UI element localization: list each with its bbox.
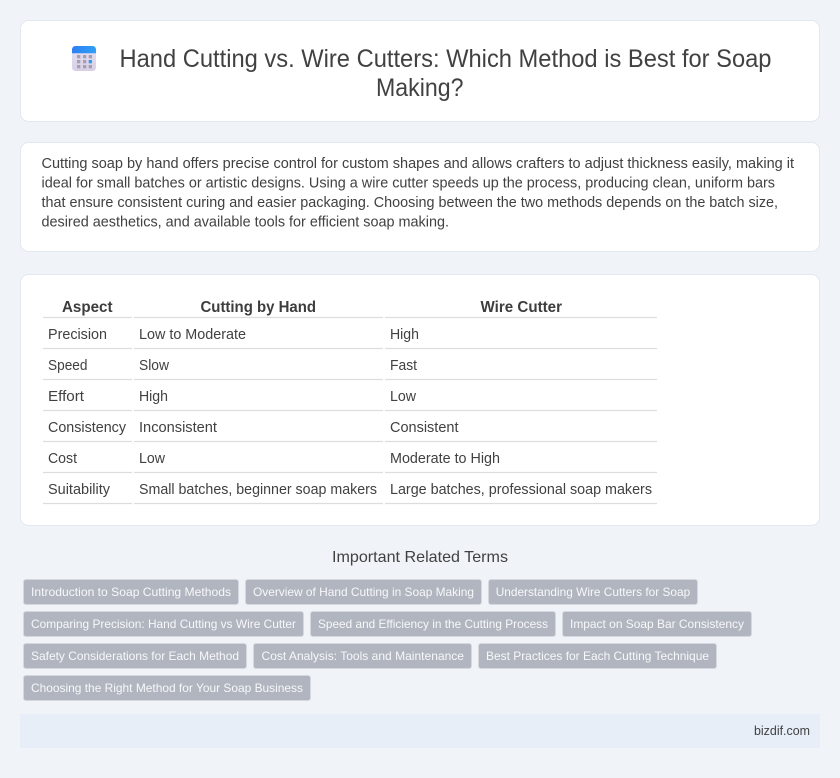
- row: suitability: Suitability: [48, 482, 111, 498]
- row: cost: Cost: [48, 451, 77, 467]
- chip: [310, 612, 556, 636]
- row: precision: [48, 327, 419, 343]
- row: precision: Low to Moderate: [139, 327, 246, 343]
- intro paragraph: Cutting soap by hand offers precise control for custom shapes and allows crafters to adjust thickness easily, making it: [42, 156, 794, 172]
- chip: [562, 612, 752, 636]
- table header row: Aspect: [62, 299, 113, 316]
- chip: Introduction to Soap Cutting Methods: [31, 585, 231, 599]
- chip: [488, 580, 698, 604]
- chip: [24, 580, 238, 604]
- chip: Best Practices for Each Cutting Technique: [486, 649, 709, 663]
- row: speed: Fast: [390, 358, 417, 374]
- chip: [254, 644, 472, 668]
- row: suitability: [48, 482, 652, 498]
- footer: [20, 714, 820, 748]
- chip: Understanding Wire Cutters for Soap: [496, 585, 691, 599]
- intro paragraph: desired aesthetics, and available tools for efficient soap making.: [42, 214, 449, 230]
- chip: Safety Considerations for Each Method: [31, 649, 239, 663]
- icon: calendar: [72, 46, 96, 71]
- row: precision: High: [390, 327, 419, 343]
- related terms chips: [24, 580, 752, 700]
- row: consistency: Consistency: [48, 420, 127, 436]
- row: suitability: Large batches, professional soap makers: [390, 482, 652, 498]
- row: cost: Moderate to High: [390, 451, 500, 467]
- row: speed: Slow: [139, 358, 170, 374]
- chip: Choosing the Right Method for Your Soap Business: [31, 681, 303, 695]
- row: effort: [48, 389, 417, 405]
- title: [120, 45, 772, 102]
- chip: Cost Analysis: Tools and Maintenance: [262, 649, 464, 663]
- chip: Overview of Hand Cutting in Soap Making: [253, 585, 474, 599]
- chip: [24, 676, 310, 700]
- heading: related terms: Important Related Terms: [332, 549, 508, 566]
- row: cost: Low: [139, 451, 166, 467]
- title: Hand Cutting vs. Wire Cutters: Which Method is Best for Soap: [120, 45, 772, 73]
- table header row: [62, 299, 562, 316]
- row: consistency: Inconsistent: [139, 420, 217, 436]
- row: cost: [48, 451, 500, 467]
- intro paragraph: that ensure consistent curing and easier packaging. Choosing between the two methods depends on the batch size,: [42, 195, 778, 211]
- row: precision: Precision: [48, 327, 107, 343]
- row: consistency: Consistent: [390, 420, 458, 436]
- chip: [478, 644, 716, 668]
- panel: introduction: [20, 142, 820, 252]
- row: suitability: Small batches, beginner soap makers: [139, 482, 377, 498]
- chip: Comparing Precision: Hand Cutting vs Wire Cutter: [31, 617, 296, 631]
- panel: title card: [20, 20, 820, 122]
- intro paragraph: [42, 156, 794, 230]
- chip: [246, 580, 482, 604]
- row: speed: Speed: [48, 358, 88, 374]
- panel: comparison table: [20, 274, 820, 526]
- chip: [24, 612, 304, 636]
- chip: [24, 644, 246, 668]
- title: Making?: [376, 74, 464, 102]
- row: effort: High: [139, 389, 168, 405]
- row: speed: [48, 358, 417, 374]
- table header row: Wire Cutter: [480, 299, 562, 316]
- intro paragraph: ideal for small batches or artistic designs. Using a wire cutter speeds up the process, producing clean, uniform bars: [42, 176, 775, 192]
- row: effort: Low: [390, 389, 417, 405]
- table header row: Cutting by Hand: [200, 299, 316, 316]
- chip: Speed and Efficiency in the Cutting Process: [318, 617, 548, 631]
- chip: Impact on Soap Bar Consistency: [570, 617, 744, 631]
- row: consistency: [48, 420, 458, 436]
- row: effort: Effort: [48, 389, 84, 405]
- footer source: bizdif.com: [754, 723, 810, 738]
